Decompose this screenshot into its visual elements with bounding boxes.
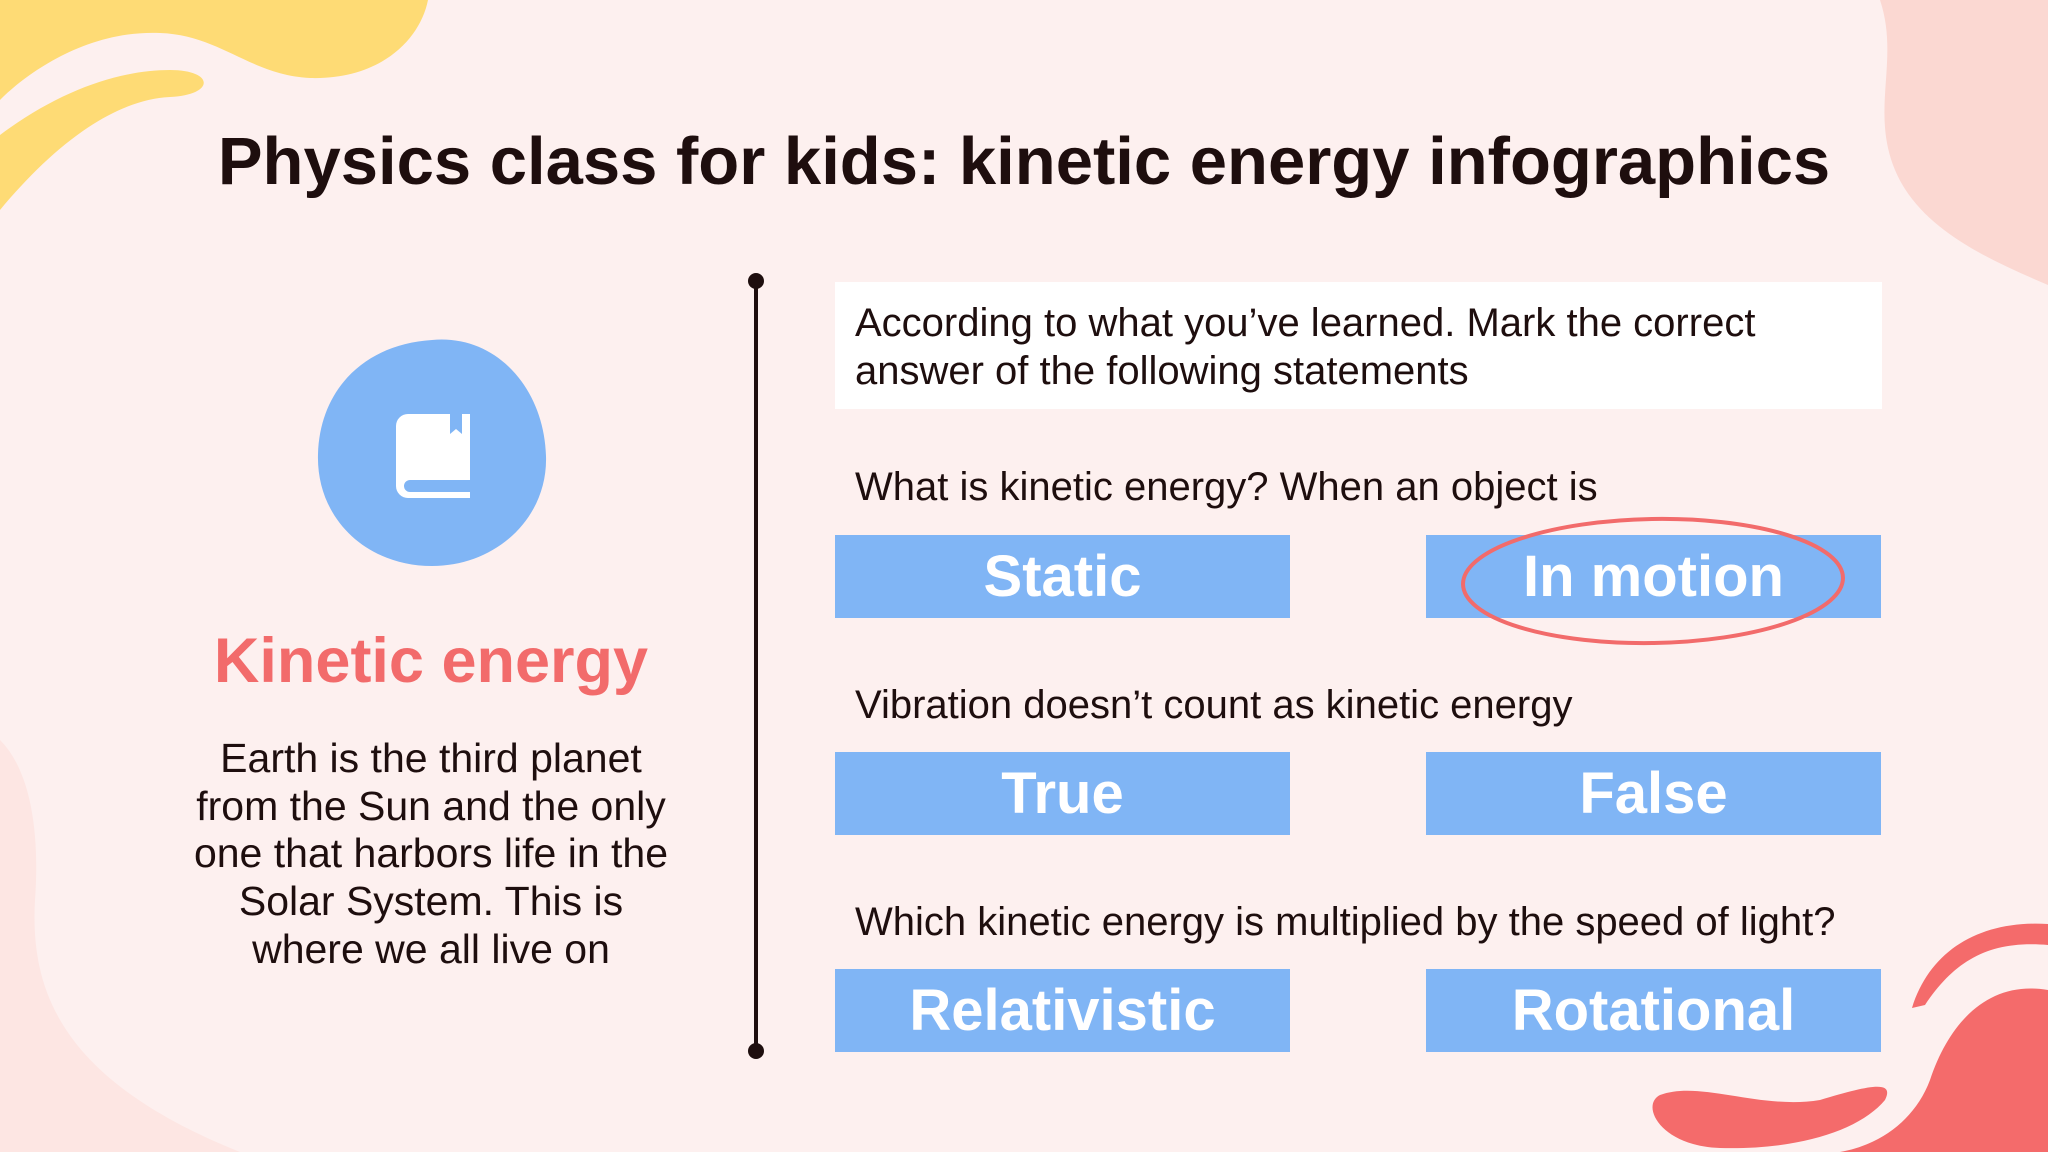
instruction box xyxy=(835,282,1882,409)
question 1: What is kinetic energy? When an object is xyxy=(855,465,1598,509)
button: Relativistic xyxy=(835,969,1290,1052)
text block: description: Earth is the third planet xyxy=(220,735,642,781)
button: True: True xyxy=(1001,761,1124,826)
text block: description: where we all live on xyxy=(252,926,610,972)
button: Rotational: Rotational xyxy=(1512,978,1795,1043)
button: Static xyxy=(835,535,1290,618)
instruction box: answer of the following statements xyxy=(855,349,1469,393)
button: False xyxy=(1426,752,1881,835)
heading: Kinetic energy: Kinetic energy xyxy=(214,626,648,696)
button: Static: Static xyxy=(984,544,1141,609)
button: Rotational xyxy=(1426,969,1881,1052)
button: In motion: In motion xyxy=(1523,544,1784,609)
question 3: Which kinetic energy is multiplied by the speed of light? xyxy=(855,900,1836,944)
icon: book in blue blob xyxy=(318,340,546,566)
text block: description xyxy=(194,735,668,972)
button: In motion xyxy=(1426,535,1881,618)
text block: description: one that harbors life in the xyxy=(194,830,668,876)
question 2: Vibration doesn’t count as kinetic energy xyxy=(855,683,1572,727)
button: False: False xyxy=(1579,761,1728,826)
text block: description: Solar System. This is xyxy=(239,878,623,924)
vertical divider xyxy=(748,273,764,1059)
button: True xyxy=(835,752,1290,835)
callout: answer circle xyxy=(1461,516,1845,646)
title: Physics class for kids: kinetic energy infographics xyxy=(218,124,1830,199)
button: Relativistic: Relativistic xyxy=(909,978,1216,1043)
instruction box: According to what you’ve learned. Mark the correct xyxy=(855,301,1755,345)
text block: description: from the Sun and the only xyxy=(196,783,666,829)
